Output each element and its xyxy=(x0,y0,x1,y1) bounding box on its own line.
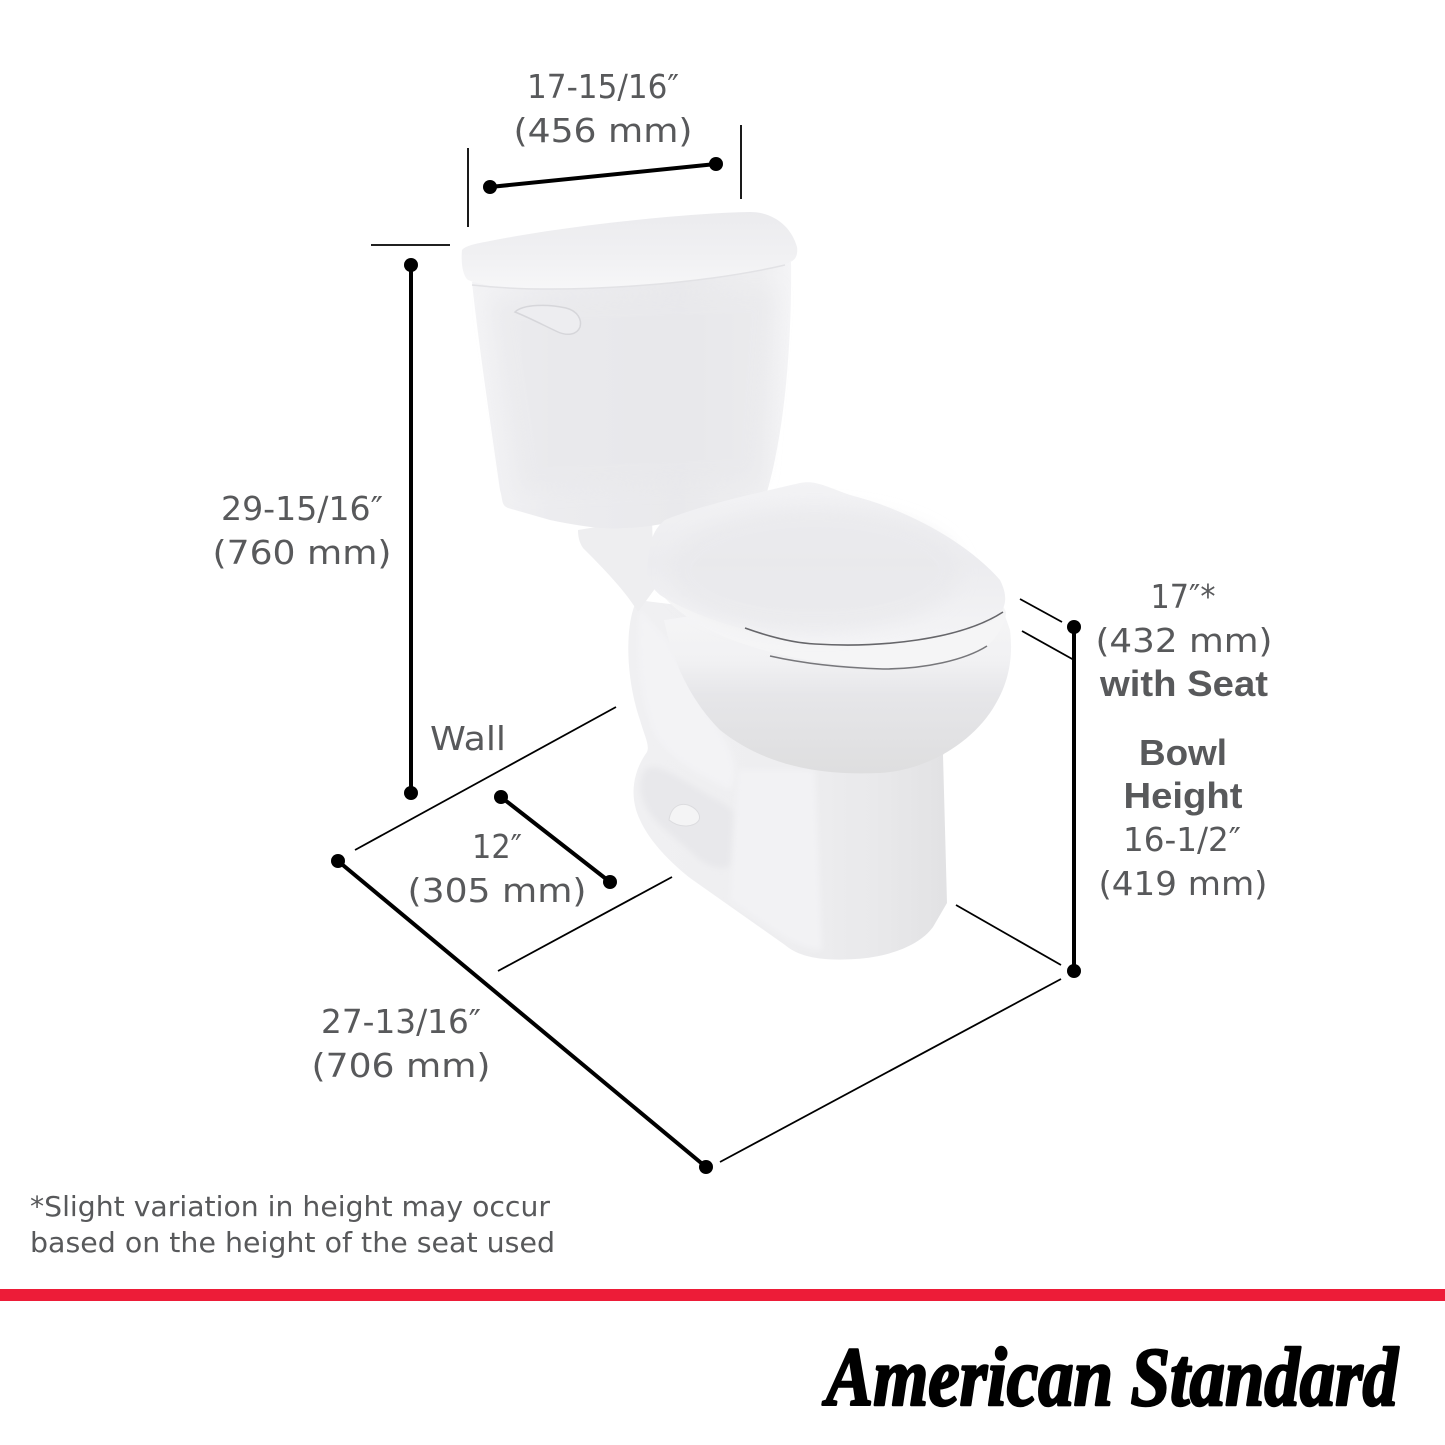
tank shading xyxy=(490,290,775,490)
toilet base xyxy=(628,600,980,960)
wall line xyxy=(355,707,616,850)
seat gap line xyxy=(745,612,1003,645)
footnote: based on the height of the seat used xyxy=(30,1226,555,1259)
label: height with seat: 17″* xyxy=(1150,577,1216,616)
depth dimension xyxy=(331,854,1061,1174)
label: width: (456 mm) xyxy=(514,111,692,150)
bowl rim xyxy=(650,570,1006,668)
footnote: *Slight variation in height may occur xyxy=(30,1190,550,1223)
label: bowl height: Height xyxy=(1124,775,1243,816)
label: depth: 27-13/16″ xyxy=(321,1002,481,1041)
dimension lines xyxy=(331,125,1081,1174)
toilet illustration xyxy=(462,212,1011,960)
label: height with seat: (432 mm) xyxy=(1096,621,1272,660)
bowl height dimension xyxy=(956,599,1081,978)
rough-in dimension xyxy=(494,790,672,971)
base front facet highlight xyxy=(730,770,822,950)
tank neck xyxy=(578,518,654,612)
label: bowl height: 16-1/2″ xyxy=(1123,820,1241,859)
label: height with seat: with Seat xyxy=(1099,663,1268,704)
label: wall: Wall xyxy=(430,719,506,758)
seat lid xyxy=(647,482,1005,643)
tank body xyxy=(472,262,791,528)
flush handle xyxy=(515,305,580,334)
footnote xyxy=(30,1190,555,1259)
height dimension xyxy=(371,245,450,800)
label: width: 17-15/16″ xyxy=(527,67,679,106)
label: depth xyxy=(312,1002,490,1085)
seat inner dish xyxy=(670,508,960,632)
width dimension xyxy=(468,125,741,227)
label: width xyxy=(514,67,692,150)
label: depth: (706 mm) xyxy=(312,1046,490,1085)
label: rough-in xyxy=(408,827,586,910)
tank lid xyxy=(462,212,797,289)
trapway column xyxy=(638,610,735,790)
bowl xyxy=(664,600,1011,773)
label: bowl height: (419 mm) xyxy=(1098,864,1268,903)
label: rough-in: 12″ xyxy=(472,827,522,866)
label: bowl height: Bowl xyxy=(1139,732,1227,773)
bolt cap xyxy=(669,804,700,826)
label: rough-in: (305 mm) xyxy=(408,871,586,910)
label: bowl height xyxy=(1098,732,1268,903)
label: height with seat xyxy=(1096,577,1272,704)
rim gap line xyxy=(770,646,987,669)
trap recess xyxy=(640,767,733,868)
label: height xyxy=(212,489,392,572)
label: height: (760 mm) xyxy=(212,533,392,572)
lid underside line xyxy=(472,265,785,289)
label: height: 29-15/16″ xyxy=(221,489,383,528)
red divider xyxy=(0,1289,1445,1301)
